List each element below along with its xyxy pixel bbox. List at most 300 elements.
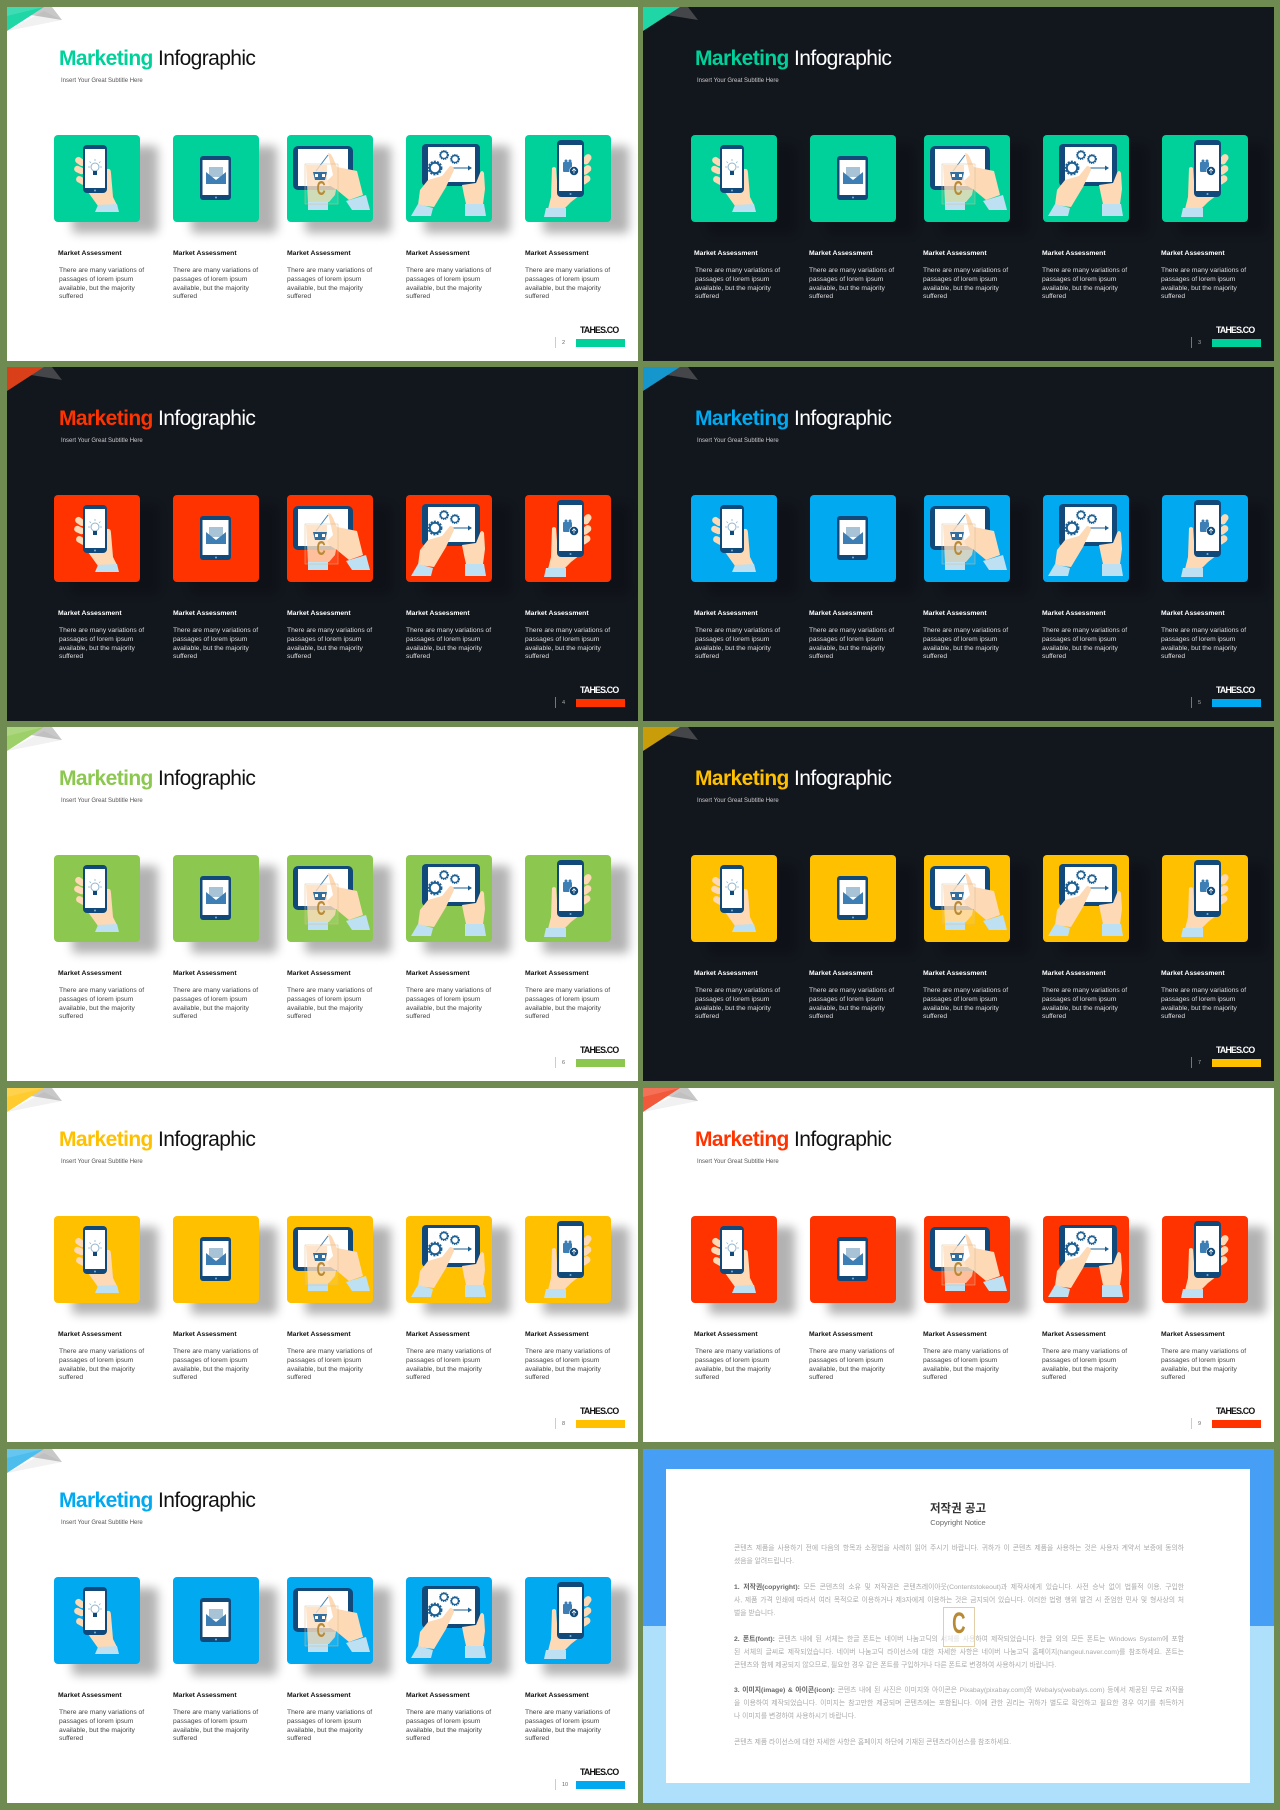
card text: available, but the majority xyxy=(406,645,482,652)
card text: available, but the majority xyxy=(525,1727,601,1734)
card text: There are many variations of xyxy=(1042,627,1127,634)
card text xyxy=(923,627,1008,662)
card heading: Market Assessment xyxy=(1161,250,1225,257)
card text xyxy=(923,267,1008,300)
footer brand and page number: TAHES.CO xyxy=(580,1045,618,1055)
card 5 xyxy=(525,855,625,1025)
subtitle: Insert Your Great Subtitle Here xyxy=(61,438,143,444)
card text: available, but the majority xyxy=(525,1005,601,1012)
footer brand and page number xyxy=(555,685,625,708)
card text xyxy=(695,987,780,1022)
card text xyxy=(1161,987,1246,1022)
notice title: 저작권 공고 xyxy=(930,1503,986,1515)
card text xyxy=(287,627,372,660)
card text: available, but the majority xyxy=(173,645,249,652)
panel: slide 2 white green xyxy=(7,7,638,361)
card text: There are many variations of xyxy=(1161,987,1246,994)
icon: hands on tablet with gears xyxy=(406,1216,492,1303)
card text: available, but the majority xyxy=(695,1005,771,1012)
card text: available, but the majority xyxy=(287,1005,363,1012)
footer brand and page number: 9 xyxy=(1198,1421,1201,1427)
card text: available, but the majority xyxy=(59,1005,135,1012)
corner decoration xyxy=(7,727,77,763)
footer brand and page number xyxy=(1188,1404,1264,1432)
card text: There are many variations of xyxy=(525,1709,610,1716)
card heading: Market Assessment xyxy=(173,250,237,257)
card text: passages of lorem ipsum xyxy=(59,996,133,1003)
card text: suffered xyxy=(1161,653,1185,660)
card text: There are many variations of xyxy=(59,1348,144,1355)
card text: available, but the majority xyxy=(1161,1005,1237,1012)
card text: passages of lorem ipsum xyxy=(809,636,883,643)
card text xyxy=(406,1348,491,1383)
panel: slide 8 white yellow xyxy=(7,1088,638,1442)
card 3 xyxy=(923,135,1010,300)
card heading: Market Assessment xyxy=(923,1331,987,1338)
card text: available, but the majority xyxy=(173,1366,249,1373)
card 2 xyxy=(809,135,896,300)
card text: available, but the majority xyxy=(59,1366,135,1373)
title: Marketing Infographic xyxy=(695,1128,891,1151)
card heading: Market Assessment xyxy=(287,1331,351,1338)
card 1 xyxy=(54,495,144,660)
card text: suffered xyxy=(406,293,430,300)
footer brand and page number: 6 xyxy=(562,1060,565,1066)
card heading: Market Assessment xyxy=(923,970,987,977)
card text: passages of lorem ipsum xyxy=(695,636,769,643)
card text: passages of lorem ipsum xyxy=(406,1718,480,1725)
icon: hand holding phone with bulb xyxy=(54,495,140,582)
card 5 xyxy=(525,495,611,660)
icon: hand holding phone with upload xyxy=(525,495,611,582)
card 3 xyxy=(287,855,387,1025)
card text: available, but the majority xyxy=(406,1005,482,1012)
card text: suffered xyxy=(59,653,83,660)
card heading: Market Assessment xyxy=(58,970,122,977)
footer brand and page number xyxy=(1188,1043,1264,1071)
section 3: image and icon: 을 이용하여 제작되었습니다. 이미지는 참고만한 제공되며 콘텐츠에는 포함됩니다. 이에 관한 권리는 귀하가 별도로 확인하고 필요한 경우 여기를 취득하거 xyxy=(734,1700,1184,1707)
card text: passages of lorem ipsum xyxy=(59,1357,133,1364)
card text: There are many variations of xyxy=(923,987,1008,994)
card 2 xyxy=(173,1216,273,1386)
card text: There are many variations of xyxy=(287,987,372,994)
card 3 xyxy=(287,1216,387,1386)
card text: available, but the majority xyxy=(809,645,885,652)
section 3: image and icon: 나 이미지를 변경하여 사용하시기 바랍니다. xyxy=(734,1713,856,1720)
card text: available, but the majority xyxy=(59,285,135,292)
panel: slide 4 dark red xyxy=(7,367,638,721)
card 4 xyxy=(406,135,516,300)
card text: suffered xyxy=(809,1013,833,1020)
card 3 xyxy=(287,1577,387,1747)
card heading: Market Assessment xyxy=(525,970,589,977)
card heading: Market Assessment xyxy=(287,610,351,617)
corner decoration xyxy=(7,1088,77,1124)
icon: hands on tablet with gears xyxy=(406,495,492,582)
card text: available, but the majority xyxy=(695,1366,771,1373)
card heading: Market Assessment xyxy=(173,610,237,617)
card text: suffered xyxy=(809,653,833,660)
card text: suffered xyxy=(1161,293,1185,300)
card text: available, but the majority xyxy=(1161,285,1237,292)
card heading: Market Assessment xyxy=(1042,250,1106,257)
card heading: Market Assessment xyxy=(58,1331,122,1338)
icon: phone with envelope xyxy=(810,135,896,222)
card 5 xyxy=(1161,1216,1261,1386)
card text xyxy=(809,987,894,1022)
card text xyxy=(59,267,144,300)
card text: suffered xyxy=(1042,1013,1066,1020)
card text: There are many variations of xyxy=(406,1348,491,1355)
card text: passages of lorem ipsum xyxy=(406,276,480,283)
card heading: Market Assessment xyxy=(809,250,873,257)
card text: suffered xyxy=(923,653,947,660)
card text: available, but the majority xyxy=(923,285,999,292)
title: Marketing Infographic xyxy=(695,47,891,70)
title: Marketing Infographic xyxy=(59,1489,255,1512)
card text xyxy=(695,1348,780,1383)
subtitle: Insert Your Great Subtitle Here xyxy=(697,438,779,444)
card text: suffered xyxy=(59,293,83,300)
icon: hands on tablet with basket xyxy=(924,1216,1010,1303)
card text: available, but the majority xyxy=(173,1005,249,1012)
card 2 xyxy=(173,1577,273,1747)
subtitle: Insert Your Great Subtitle Here xyxy=(61,1520,143,1526)
card text xyxy=(809,267,894,300)
icon: hands on tablet with basket xyxy=(287,1577,373,1664)
card text: There are many variations of xyxy=(1161,627,1246,634)
card heading: Market Assessment xyxy=(287,1692,351,1699)
card text: suffered xyxy=(287,1013,311,1020)
card text xyxy=(287,987,372,1022)
corner decoration xyxy=(7,1449,77,1485)
card text xyxy=(525,1709,610,1744)
card heading: Market Assessment xyxy=(58,1692,122,1699)
card text: suffered xyxy=(695,653,719,660)
card heading: Market Assessment xyxy=(1161,970,1225,977)
card 4 xyxy=(1042,495,1142,665)
card text: There are many variations of xyxy=(287,627,372,634)
card text: passages of lorem ipsum xyxy=(1161,276,1235,283)
card 3 xyxy=(923,1216,1023,1386)
card text: suffered xyxy=(1161,1013,1185,1020)
icon: hand holding phone with upload xyxy=(525,1216,611,1303)
card text xyxy=(1042,267,1128,300)
icon: hand holding phone with bulb xyxy=(54,1216,140,1303)
card 2 xyxy=(809,495,909,665)
card text: There are many variations of xyxy=(406,987,491,994)
card 3 xyxy=(923,495,1023,665)
card text: passages of lorem ipsum xyxy=(923,1357,997,1364)
card text: There are many variations of xyxy=(525,627,610,634)
footer brand and page number: 5 xyxy=(1198,700,1201,706)
footer brand and page number: 3 xyxy=(1198,340,1201,346)
card text: There are many variations of xyxy=(525,1348,610,1355)
card heading: Market Assessment xyxy=(525,1331,589,1338)
card text: passages of lorem ipsum xyxy=(287,996,361,1003)
card text: available, but the majority xyxy=(923,645,999,652)
title: Marketing Infographic xyxy=(695,407,891,430)
section 3: image and icon xyxy=(734,1684,1184,1723)
card text: passages of lorem ipsum xyxy=(287,1718,361,1725)
icon: hands on tablet with basket xyxy=(924,495,1010,582)
card heading: Market Assessment xyxy=(809,610,873,617)
card 5 xyxy=(1161,495,1261,665)
card heading: Market Assessment xyxy=(406,610,470,617)
footer brand and page number: TAHES.CO xyxy=(1216,685,1254,695)
footer brand and page number xyxy=(552,1765,628,1793)
icon: hand holding phone with upload xyxy=(525,855,611,942)
corner decoration xyxy=(643,1088,713,1124)
panel: copyright notice xyxy=(643,1449,1274,1803)
card heading: Market Assessment xyxy=(58,610,122,617)
card text: available, but the majority xyxy=(1042,645,1118,652)
icon: hand holding phone with upload xyxy=(1162,1216,1248,1303)
footer brand and page number: TAHES.CO xyxy=(580,325,618,335)
card text: available, but the majority xyxy=(1161,1366,1237,1373)
card text: There are many variations of xyxy=(287,1709,372,1716)
card text: available, but the majority xyxy=(1042,1366,1118,1373)
card heading: Market Assessment xyxy=(694,610,758,617)
card text xyxy=(923,987,1008,1022)
card heading: Market Assessment xyxy=(525,610,589,617)
title: Marketing Infographic xyxy=(59,1128,255,1151)
card text: There are many variations of xyxy=(1161,1348,1246,1355)
card text: suffered xyxy=(406,1013,430,1020)
card text: passages of lorem ipsum xyxy=(695,996,769,1003)
corner decoration xyxy=(643,367,698,391)
card text: passages of lorem ipsum xyxy=(1042,1357,1116,1364)
card text: available, but the majority xyxy=(1042,1005,1118,1012)
card heading: Market Assessment xyxy=(287,250,351,257)
card 2 xyxy=(173,495,259,660)
card text: passages of lorem ipsum xyxy=(695,276,769,283)
card text: There are many variations of xyxy=(525,267,610,274)
card 4 xyxy=(406,1577,506,1747)
card text xyxy=(173,627,258,660)
card text: available, but the majority xyxy=(525,285,601,292)
card text: available, but the majority xyxy=(173,285,249,292)
card 2 xyxy=(809,1216,909,1386)
card text: passages of lorem ipsum xyxy=(1161,1357,1235,1364)
icon: hands on tablet with gears xyxy=(1043,1216,1129,1303)
icon: hands on tablet with basket xyxy=(287,855,373,942)
card heading: Market Assessment xyxy=(809,1331,873,1338)
card text: suffered xyxy=(59,1013,83,1020)
card text xyxy=(59,987,144,1022)
footer brand and page number xyxy=(555,325,625,348)
card text: suffered xyxy=(173,1735,197,1742)
card text: passages of lorem ipsum xyxy=(525,636,599,643)
card text: suffered xyxy=(809,293,833,300)
subtitle: Insert Your Great Subtitle Here xyxy=(61,798,143,804)
card text: available, but the majority xyxy=(1161,645,1237,652)
icon: hands on tablet with basket xyxy=(287,1216,373,1303)
card text: There are many variations of xyxy=(59,1709,144,1716)
card text: suffered xyxy=(406,1735,430,1742)
card text: passages of lorem ipsum xyxy=(809,1357,883,1364)
card text xyxy=(59,1709,144,1744)
icon: phone with envelope xyxy=(810,495,896,582)
card heading: Market Assessment xyxy=(1161,610,1225,617)
card text xyxy=(406,627,492,660)
footer brand and page number: TAHES.CO xyxy=(1216,1406,1254,1416)
icon: hand holding phone with bulb xyxy=(691,135,777,222)
card text: There are many variations of xyxy=(809,627,894,634)
card text: available, but the majority xyxy=(287,285,363,292)
card text: available, but the majority xyxy=(525,645,601,652)
card text: suffered xyxy=(1042,293,1066,300)
card 1 xyxy=(691,135,780,300)
footer brand and page number xyxy=(552,1043,628,1071)
card 1 xyxy=(54,855,154,1025)
footer brand and page number xyxy=(1188,683,1264,711)
subtitle: Insert Your Great Subtitle Here xyxy=(61,1159,143,1165)
section 2: font: 된 서체의 글씨로 제작되었습니다. 네이버 나눔고딕 라이선스에 대한 자세한 사항은 네이버 나눔고딕 홈페이지(hangeul.naver.com)를 참조하세요. 폰트는 xyxy=(734,1649,1184,1656)
icon: hands on tablet with basket xyxy=(287,495,373,582)
card text xyxy=(1161,627,1246,662)
card text: suffered xyxy=(695,1374,719,1381)
card text: available, but the majority xyxy=(406,1727,482,1734)
icon: hand holding phone with bulb xyxy=(54,1577,140,1664)
icon: phone with envelope xyxy=(173,1216,259,1303)
icon: hands on tablet with gears xyxy=(406,135,492,222)
footer brand and page number: 8 xyxy=(562,1421,565,1427)
card text xyxy=(59,627,144,660)
card text: passages of lorem ipsum xyxy=(525,996,599,1003)
subtitle: Insert Your Great Subtitle Here xyxy=(61,78,143,84)
card 4 xyxy=(1042,1216,1142,1386)
card 3 xyxy=(287,135,397,300)
card text xyxy=(1161,1348,1246,1383)
card 5 xyxy=(525,1216,625,1386)
card heading: Market Assessment xyxy=(525,1692,589,1699)
card heading: Market Assessment xyxy=(809,970,873,977)
card text: suffered xyxy=(287,293,311,300)
icon: phone with envelope xyxy=(173,135,259,222)
card text: available, but the majority xyxy=(59,645,135,652)
card heading: Market Assessment xyxy=(406,1331,470,1338)
card text: There are many variations of xyxy=(695,987,780,994)
intro paragraph: 셨음을 알려드립니다. xyxy=(734,1558,794,1565)
card text xyxy=(173,1709,258,1744)
icon: hand holding phone with bulb xyxy=(54,855,140,942)
subtitle: Insert Your Great Subtitle Here xyxy=(697,1159,779,1165)
card heading: Market Assessment xyxy=(173,1331,237,1338)
card text: passages of lorem ipsum xyxy=(287,276,361,283)
card text: suffered xyxy=(695,1013,719,1020)
panel: slide 10 white blue xyxy=(7,1449,638,1803)
card text: passages of lorem ipsum xyxy=(173,1718,247,1725)
card text: available, but the majority xyxy=(809,1366,885,1373)
footer brand and page number: 7 xyxy=(1198,1060,1201,1066)
card heading: Market Assessment xyxy=(287,970,351,977)
section 2: font: 콘텐츠와 함께 제공되지 않으므로, 필요한 경우 같은 폰트를 구입하거나 다른 폰트로 변경하여 사용하시기 바랍니다. xyxy=(734,1662,1056,1669)
card text: There are many variations of xyxy=(923,267,1008,274)
watermark badge: C xyxy=(952,1607,966,1640)
icon: phone with envelope xyxy=(810,855,896,942)
section 1: copyright: 벌을 받습니다. xyxy=(734,1610,775,1617)
card text: There are many variations of xyxy=(59,987,144,994)
card text: There are many variations of xyxy=(406,267,491,274)
card heading: Market Assessment xyxy=(1042,1331,1106,1338)
card 1 xyxy=(690,855,790,1025)
card text: suffered xyxy=(923,1374,947,1381)
card 5 xyxy=(525,1577,625,1747)
card text xyxy=(406,987,491,1022)
card heading: Market Assessment xyxy=(694,1331,758,1338)
card text: There are many variations of xyxy=(406,1709,491,1716)
card text: suffered xyxy=(923,1013,947,1020)
card text: available, but the majority xyxy=(287,1727,363,1734)
card text: There are many variations of xyxy=(695,627,780,634)
title: Marketing Infographic xyxy=(59,47,255,70)
card text xyxy=(406,267,492,300)
card 4 xyxy=(406,1216,506,1386)
card text: available, but the majority xyxy=(923,1005,999,1012)
notice subtitle: Copyright Notice xyxy=(930,1518,986,1527)
card text xyxy=(1042,987,1127,1022)
card 1 xyxy=(54,1577,154,1747)
card 3 xyxy=(923,855,1023,1025)
card text: available, but the majority xyxy=(695,645,771,652)
card text: There are many variations of xyxy=(287,267,372,274)
card text: suffered xyxy=(525,293,549,300)
card text xyxy=(287,267,372,300)
card text: suffered xyxy=(287,1374,311,1381)
card text xyxy=(525,987,610,1022)
card heading: Market Assessment xyxy=(694,250,758,257)
card text xyxy=(809,1348,894,1383)
panel: slide 7 dark yellow xyxy=(643,727,1274,1081)
card heading: Market Assessment xyxy=(1161,1331,1225,1338)
card 5 xyxy=(525,135,635,300)
card text: passages of lorem ipsum xyxy=(287,636,361,643)
footer brand and page number: TAHES.CO xyxy=(1216,1045,1254,1055)
card text xyxy=(525,627,610,660)
card text: passages of lorem ipsum xyxy=(1042,636,1116,643)
card text: passages of lorem ipsum xyxy=(1161,996,1235,1003)
card text: available, but the majority xyxy=(59,1727,135,1734)
card text: There are many variations of xyxy=(173,1348,258,1355)
card text: passages of lorem ipsum xyxy=(59,1718,133,1725)
card heading: Market Assessment xyxy=(406,1692,470,1699)
icon: hand holding phone with bulb xyxy=(691,1216,777,1303)
card text xyxy=(525,1348,610,1383)
card text: There are many variations of xyxy=(59,267,144,274)
panel: slide 9 white red xyxy=(643,1088,1274,1442)
card text: suffered xyxy=(173,293,197,300)
title: Marketing Infographic xyxy=(59,767,255,790)
intro paragraph: 콘텐츠 제품을 사용하기 전에 다음의 항목과 소정법을 사례히 읽어 주시기 바랍니다. 귀하가 이 콘텐츠 제품을 사용하는 것은 사용자 계약서 보증에 동의하 xyxy=(734,1545,1184,1552)
card text: available, but the majority xyxy=(809,285,885,292)
card text: There are many variations of xyxy=(695,267,780,274)
card text: available, but the majority xyxy=(173,1727,249,1734)
intro paragraph xyxy=(734,1542,1184,1568)
card text xyxy=(695,627,780,662)
notice sheet xyxy=(666,1469,1250,1783)
card text xyxy=(59,1348,144,1383)
footer brand and page number: TAHES.CO xyxy=(580,685,618,695)
card text: suffered xyxy=(59,1735,83,1742)
card text: suffered xyxy=(406,653,430,660)
icon: hand holding phone with bulb xyxy=(691,495,777,582)
card text: passages of lorem ipsum xyxy=(173,276,247,283)
card text: suffered xyxy=(59,1374,83,1381)
card text: There are many variations of xyxy=(1161,267,1246,274)
icon: hands on tablet with gears xyxy=(1043,855,1129,942)
card heading: Market Assessment xyxy=(694,970,758,977)
